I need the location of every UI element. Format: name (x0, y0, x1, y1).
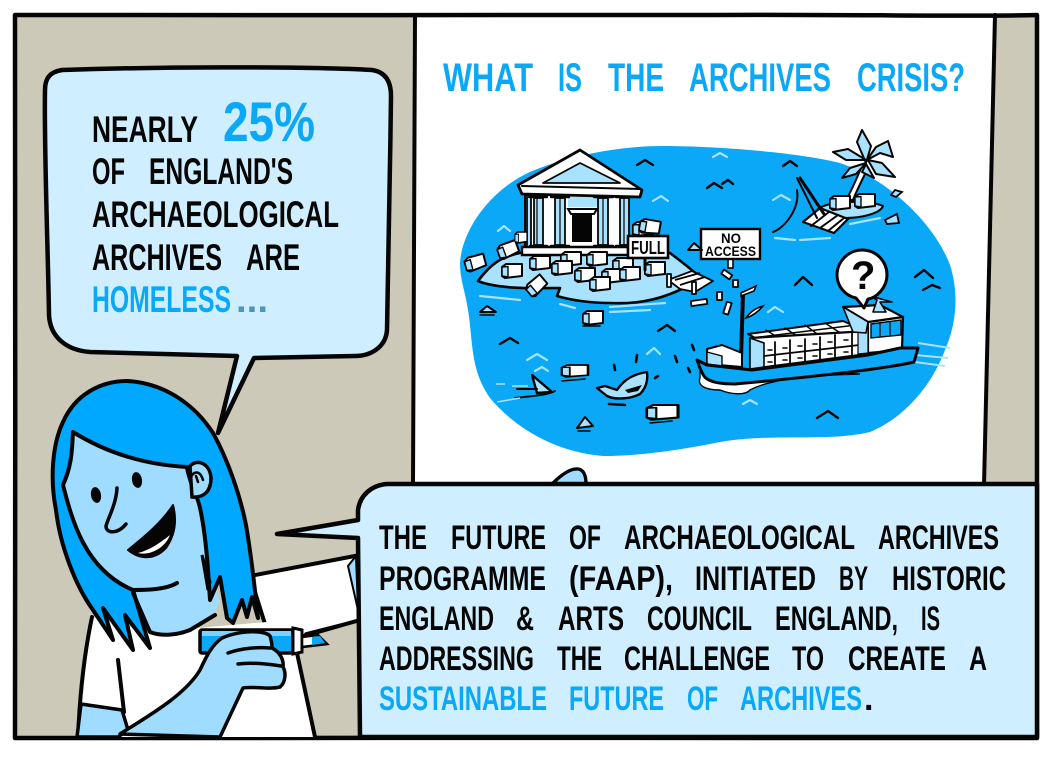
caption text: ENGLAND (379, 600, 494, 638)
pointing arm sleeve (250, 555, 360, 640)
caption text: INITIATED (695, 560, 816, 598)
small arm tip peeking above caption (552, 469, 586, 484)
museum building (518, 150, 642, 255)
caption text: FUTURE (569, 680, 664, 718)
neck and face (63, 432, 220, 635)
forearm sleeve line (306, 621, 357, 634)
caption text: THE (557, 640, 602, 678)
bubble text: ... (236, 279, 268, 320)
FULL sign: FULL (631, 238, 665, 258)
t-shirt (77, 617, 315, 737)
splash marks (675, 345, 694, 372)
caption text: IS (921, 600, 940, 638)
caption text: COUNCIL (647, 600, 752, 638)
boxes on island (464, 218, 665, 298)
waves: black marks (500, 160, 940, 418)
arm sliver at panel edge (348, 556, 358, 610)
illustration: sea of lost archives (460, 130, 955, 456)
containers front (750, 331, 868, 369)
caption text: TO (792, 640, 824, 678)
caption text: ENGLAND, (775, 600, 898, 638)
shark fin (496, 375, 555, 402)
marker (200, 628, 327, 654)
question mark bubble: ? (851, 254, 875, 298)
bow containers (707, 345, 742, 367)
island with museum (464, 150, 738, 315)
hair shadow (202, 555, 210, 590)
caption text: FUTURE (451, 519, 546, 557)
caption text: PROGRAMME (379, 560, 546, 598)
caption text: & (516, 600, 534, 638)
NO ACCESS sign (701, 229, 760, 268)
NO ACCESS sign: ACCESS (705, 243, 756, 259)
chin line (133, 583, 215, 635)
speech bubble: homeless statistic (45, 67, 391, 433)
hair (53, 381, 258, 650)
caption text: ARTS (558, 600, 624, 638)
caption text: BY (839, 560, 868, 598)
bubble text: 25% (223, 90, 315, 153)
floating boxes (480, 243, 702, 431)
mouth (128, 505, 175, 557)
bubble text: ARE (246, 237, 300, 278)
caption text: CHALLENGE (624, 640, 770, 678)
container ship (675, 250, 950, 394)
character: archaeologist with marker (53, 381, 360, 737)
caption text: THE (379, 519, 427, 557)
eyes (90, 471, 143, 504)
mast (741, 293, 743, 358)
palm island and wrecked raft (773, 130, 902, 240)
NO ACCESS sign: NO (721, 230, 741, 246)
wake (699, 372, 860, 394)
left arm (77, 704, 128, 737)
broken pier (667, 269, 738, 315)
caption text: ARCHIVES (740, 680, 862, 718)
caption text: HISTORIC (892, 560, 1006, 598)
waves: pale marks (480, 153, 790, 404)
teeth (138, 535, 170, 554)
caption panel (277, 484, 1037, 737)
caption text: OF (687, 680, 718, 718)
sea blob (460, 146, 955, 456)
caption text: SUSTAINABLE (379, 680, 547, 718)
bridge tower (868, 317, 903, 353)
bubble text: ENGLAND'S (149, 151, 293, 192)
bubble text: OF (92, 151, 125, 192)
bubble text: ARCHAEOLOGICAL (92, 194, 339, 235)
title: THE (608, 56, 664, 100)
caption text: ARCHAEOLOGICAL (624, 519, 855, 557)
bubble text: ARCHIVES (92, 237, 222, 278)
title: IS (558, 56, 582, 100)
caption text: ARCHIVES (878, 519, 999, 557)
hand and forearm (120, 632, 285, 737)
title: ARCHIVES (689, 56, 831, 100)
bubble text: HOMELESS (92, 279, 231, 320)
nose (106, 488, 126, 532)
title (443, 56, 965, 100)
title: WHAT (443, 56, 533, 100)
bubble text (92, 90, 339, 320)
caption text: . (864, 680, 873, 718)
hull (697, 348, 918, 384)
bubble text: NEARLY (92, 109, 198, 150)
inner ear (190, 472, 203, 482)
containers deck top (748, 321, 868, 344)
caption text: CREATE (848, 640, 946, 678)
caption text: (FAAP), (569, 560, 673, 598)
caption text (379, 519, 1006, 718)
finger lines (228, 648, 281, 666)
ear (190, 462, 211, 497)
caption text: A (969, 640, 987, 678)
title: CRISIS? (857, 56, 965, 100)
question mark bubble (837, 250, 887, 308)
caption text: OF (569, 519, 601, 557)
shark (597, 355, 658, 405)
caption text: ADDRESSING (379, 640, 534, 678)
FULL sign (628, 236, 668, 270)
